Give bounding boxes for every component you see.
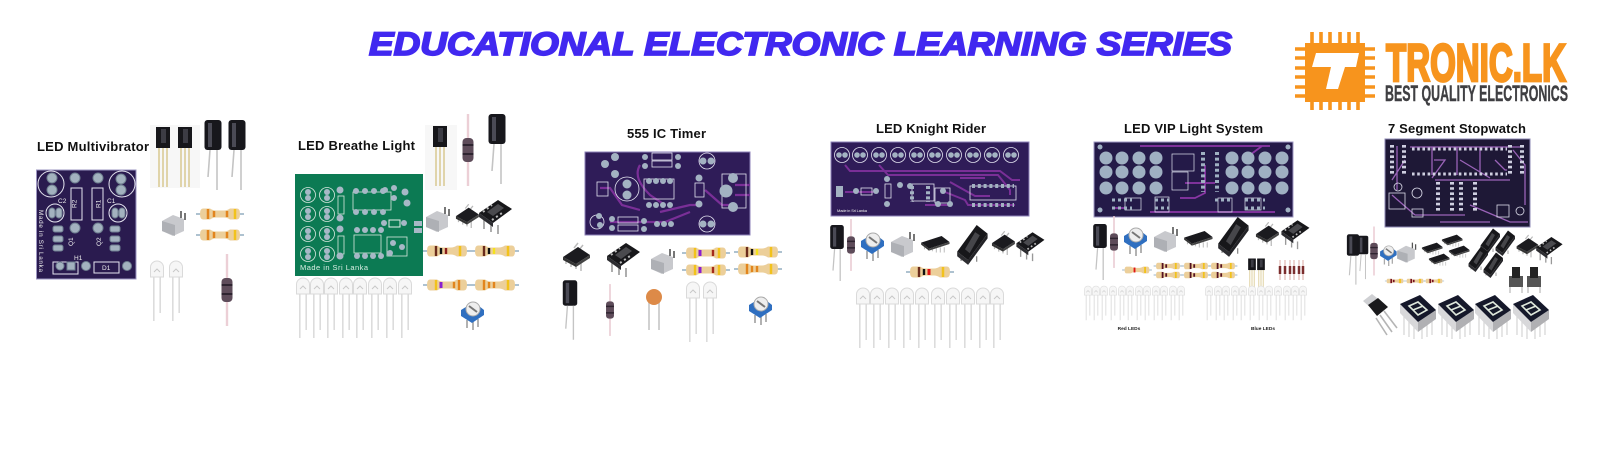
circuit board: D1 xyxy=(102,265,111,272)
panel: 555 IC Timer xyxy=(563,126,782,342)
socket xyxy=(957,225,988,265)
diode xyxy=(1370,227,1378,275)
seven-segment displays xyxy=(1400,295,1549,339)
resistors xyxy=(1385,279,1444,283)
transistor xyxy=(425,125,457,190)
panel: LED Breathe Light xyxy=(295,114,519,338)
voltage regulator xyxy=(1363,294,1397,335)
icon: orange chip with T xyxy=(1295,32,1375,110)
circuit board xyxy=(1094,142,1293,217)
circuit board: Q2 xyxy=(96,237,103,246)
circuit board xyxy=(36,170,136,279)
trimmer xyxy=(861,233,884,261)
capacitor xyxy=(1093,224,1107,280)
diode xyxy=(222,254,232,326)
panel: LED VIP Light System xyxy=(1084,121,1309,332)
board text: Made in Sri Lanka xyxy=(300,263,369,272)
LEDs xyxy=(686,282,716,342)
capacitors xyxy=(1347,234,1368,285)
trimmer xyxy=(1380,246,1397,266)
switch xyxy=(1397,243,1416,263)
circuit board: C1 xyxy=(107,198,116,205)
diode xyxy=(606,284,614,336)
circuit board: R2 xyxy=(72,199,78,208)
trimmer xyxy=(1124,228,1147,256)
small diodes xyxy=(1280,260,1303,280)
capacitor xyxy=(488,114,506,184)
ceramic capacitor xyxy=(646,289,662,330)
socket xyxy=(607,243,640,277)
resistors xyxy=(196,208,244,240)
capacitors xyxy=(204,120,246,190)
circuit board xyxy=(831,142,1029,216)
label: blue LEDs: Blue LEDs xyxy=(1251,326,1275,332)
capacitor xyxy=(563,280,577,340)
label: red LEDs: Red LEDs xyxy=(1118,326,1141,332)
blue LEDs xyxy=(1205,286,1307,320)
switch xyxy=(891,232,914,257)
resistor xyxy=(906,266,954,278)
circuit board: Made in Sri Lanka xyxy=(37,210,44,272)
small IC xyxy=(1256,222,1279,246)
sockets xyxy=(1468,228,1515,278)
circuit board: C2 xyxy=(58,198,67,205)
circuit board xyxy=(1385,139,1530,227)
transistors xyxy=(150,125,200,188)
trimmer xyxy=(461,302,484,330)
board text: Made in Sri Lanka xyxy=(837,208,868,213)
heading: LED Breathe Light xyxy=(298,138,416,153)
heading: 555 IC Timer xyxy=(627,126,706,141)
red LEDs xyxy=(1084,286,1185,320)
IC xyxy=(1184,231,1213,248)
circuit board: Q1 xyxy=(68,237,75,246)
logo: Tronic.lk xyxy=(1295,32,1568,110)
resistors xyxy=(682,246,782,276)
switch xyxy=(162,211,185,236)
circuit board: H1 xyxy=(74,255,83,262)
small IC xyxy=(1517,235,1538,257)
small socket xyxy=(1536,237,1563,264)
capacitor xyxy=(830,225,844,281)
heading: LED VIP Light System xyxy=(1124,121,1263,136)
LEDs xyxy=(296,278,412,338)
heading: 7 Segment Stopwatch xyxy=(1388,121,1526,136)
switch xyxy=(651,249,674,274)
ICs xyxy=(1422,235,1470,266)
IC xyxy=(921,236,950,253)
IC xyxy=(563,243,590,271)
small socket xyxy=(1016,232,1044,261)
heading: LED Multivibrator xyxy=(37,139,149,154)
resistors xyxy=(1122,263,1237,278)
circuit board xyxy=(585,152,750,235)
push buttons xyxy=(1509,267,1541,293)
heading: LED Knight Rider xyxy=(876,121,986,136)
diode xyxy=(1110,216,1118,268)
diode xyxy=(462,114,474,186)
switch, IC and socket xyxy=(426,200,512,234)
LEDs xyxy=(856,288,1004,348)
title: EDUCATIONAL ELECTRONIC LEARNING SERIES xyxy=(369,26,1233,62)
switch xyxy=(1154,227,1177,252)
panel: LED Multivibrator xyxy=(36,120,246,326)
panel: LED Knight Rider xyxy=(830,121,1044,348)
socket xyxy=(1218,217,1249,257)
diode xyxy=(847,219,855,271)
small socket xyxy=(1281,220,1309,249)
trimmer xyxy=(749,297,772,325)
panel: 7 Segment Stopwatch xyxy=(1347,121,1563,339)
LEDs xyxy=(150,261,182,321)
small IC xyxy=(992,231,1015,255)
circuit board: R1 xyxy=(96,199,102,208)
transistors xyxy=(1248,258,1265,292)
resistors xyxy=(423,246,519,290)
circuit board xyxy=(295,174,423,276)
